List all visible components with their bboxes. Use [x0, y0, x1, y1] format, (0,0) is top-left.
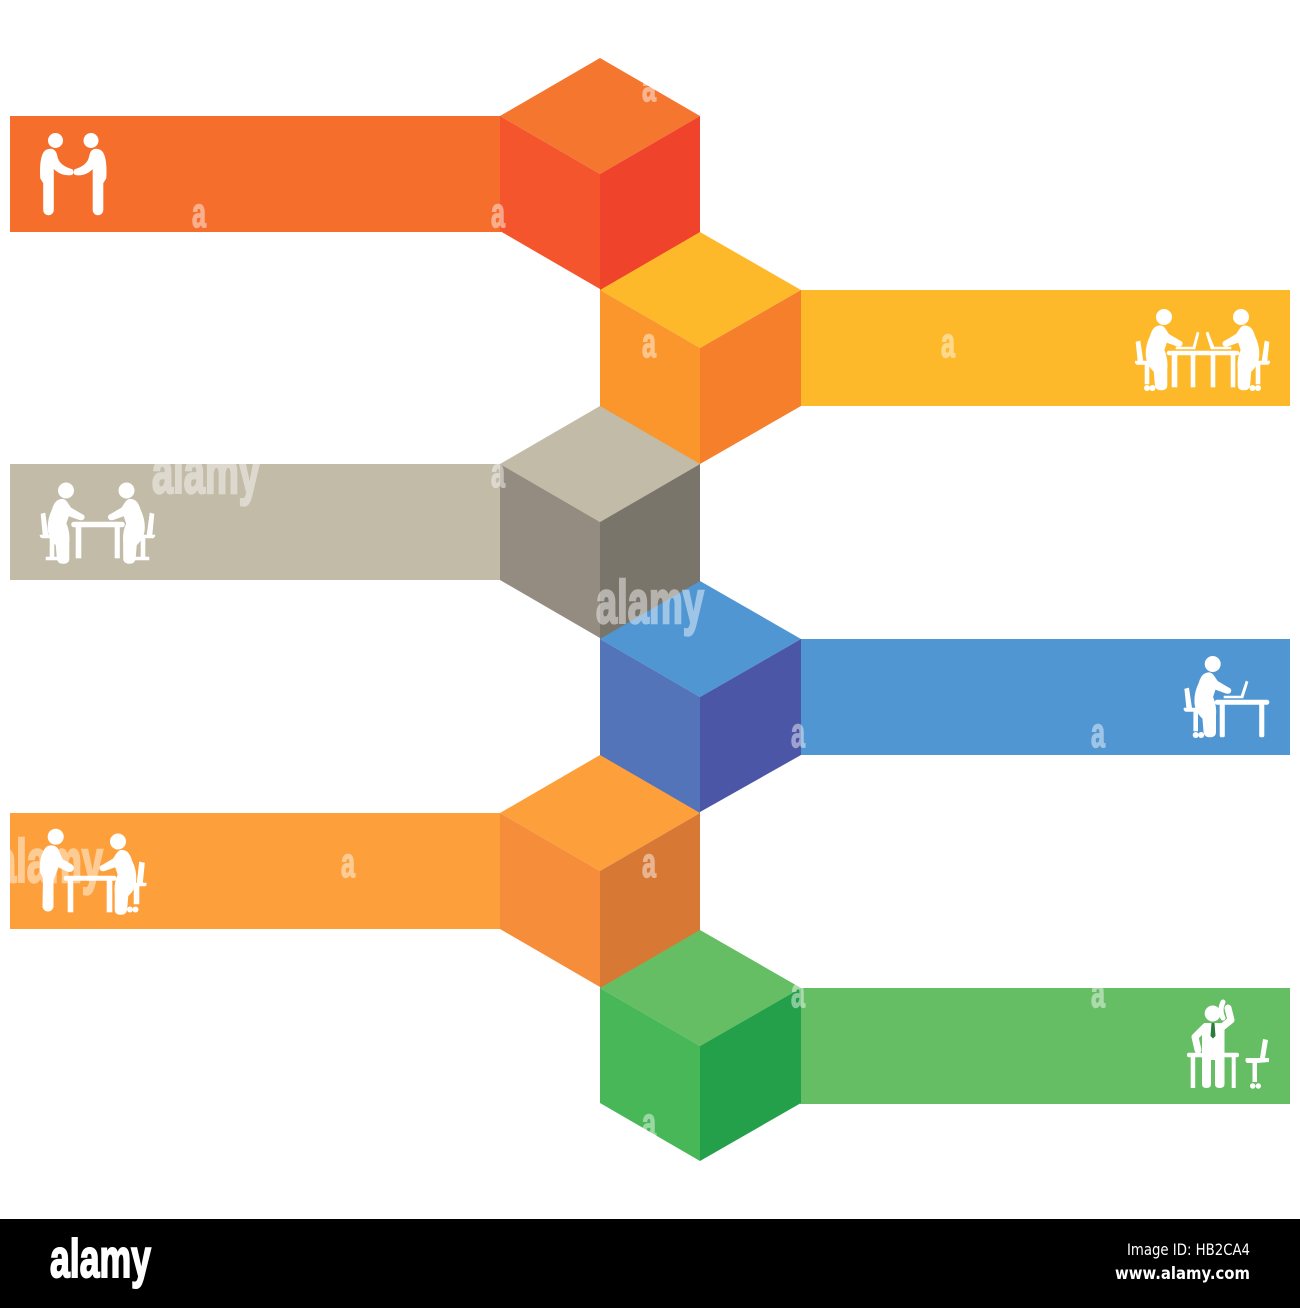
watermarks: a — [941, 319, 955, 366]
panel: step 1 red-orange — [10, 58, 700, 291]
watermarks: a — [642, 839, 656, 886]
band 4 — [800, 639, 1290, 755]
footer logo: alamy — [50, 1229, 151, 1289]
image id: Image ID: HB2CA4 — [1127, 1240, 1250, 1259]
watermarks: alamy — [596, 569, 704, 636]
cube 6 — [600, 930, 801, 1161]
cube 2 — [600, 232, 801, 466]
panel: step 4 blue — [600, 581, 1290, 814]
band 6 — [800, 988, 1290, 1104]
footer bar — [0, 1219, 1300, 1308]
band 5 — [10, 813, 501, 929]
band 1 — [10, 116, 501, 232]
watermarks: a — [791, 709, 805, 756]
band 3 — [10, 464, 501, 580]
watermarks: a — [491, 189, 505, 236]
cube 5 — [500, 755, 700, 989]
watermarks: a — [642, 1099, 656, 1146]
website: www.alamy.com — [1115, 1264, 1250, 1284]
panel: step 2 yellow — [600, 232, 1290, 466]
band 2 — [800, 290, 1290, 406]
panel: step 3 grey — [10, 406, 700, 640]
watermarks: alamy — [152, 439, 260, 506]
watermarks: a — [491, 449, 505, 496]
icon: person at laptop — [1184, 656, 1269, 738]
icon: two people at laptops — [1135, 309, 1270, 391]
panel: step 5 orange — [10, 755, 700, 989]
watermarks: a — [1091, 969, 1105, 1016]
watermarks: a — [791, 969, 805, 1016]
cube 4 — [600, 581, 801, 814]
cube 3 — [500, 406, 700, 640]
watermarks: a — [1091, 709, 1105, 756]
icon: two people at a table — [40, 482, 155, 562]
watermarks: a — [192, 189, 206, 236]
icon: standing person greeting seated person at table — [41, 829, 146, 914]
cube 1 — [500, 58, 700, 291]
watermarks: a — [341, 839, 355, 886]
panel: step 6 green — [600, 930, 1290, 1161]
watermarks: a — [642, 319, 656, 366]
icon: businessman on the phone beside desk and chair — [1187, 1002, 1269, 1089]
icon: two people shaking hands — [41, 133, 106, 214]
watermarks: a — [642, 63, 656, 110]
watermarks: alamy — [0, 828, 103, 895]
watermarks — [0, 63, 1105, 1146]
